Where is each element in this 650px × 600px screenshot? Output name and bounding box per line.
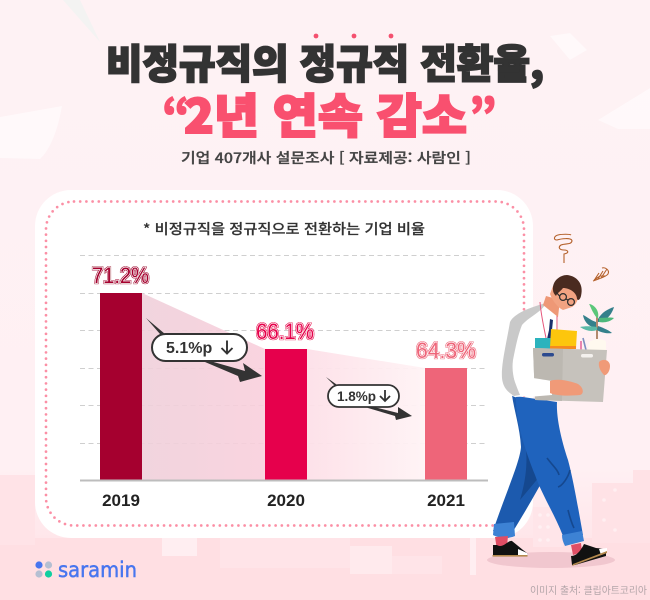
right hand bbox=[599, 360, 610, 375]
face bbox=[550, 286, 578, 310]
teal folder bbox=[535, 338, 553, 349]
title line 2: 2년 연속 감소 bbox=[184, 78, 467, 147]
title line 2: ” bbox=[469, 80, 497, 144]
paper in box bbox=[588, 339, 606, 350]
label 2021: 2021 bbox=[427, 491, 465, 510]
callout: 5.1%p decrease: 5.1%p bbox=[166, 340, 212, 357]
back leg bbox=[493, 395, 552, 538]
necktie bbox=[545, 319, 553, 348]
yellow folder bbox=[550, 329, 577, 348]
stress scribbles bbox=[554, 234, 608, 281]
lanyard bbox=[540, 302, 557, 338]
box handles bbox=[542, 353, 554, 356]
plant bbox=[580, 304, 614, 339]
background: flying papers bbox=[0, 0, 650, 234]
chart grid lines bbox=[80, 256, 488, 444]
callout: 5.1%p decrease bbox=[146, 318, 262, 382]
hair bbox=[553, 275, 582, 300]
bar 2021 bbox=[425, 368, 467, 480]
logo: saramin: saramin bbox=[58, 558, 137, 582]
shadow bbox=[487, 552, 615, 568]
label 2020: 2020 bbox=[267, 491, 305, 510]
baseline bbox=[80, 480, 488, 482]
value 64.3%: 64.3% bbox=[416, 338, 476, 363]
label 2019: 2019 bbox=[102, 491, 140, 510]
box bbox=[533, 348, 607, 402]
bar 2019 bbox=[100, 293, 142, 480]
front cuff bbox=[562, 531, 584, 546]
chart heading: * 비정규직을 정규직으로 전환하는 기업 비율 bbox=[143, 219, 425, 239]
right shoe bbox=[571, 544, 607, 566]
back cuff bbox=[493, 522, 515, 538]
shirt shadow bbox=[502, 303, 546, 396]
title line 1: 비정규직의 정규직 전환율, bbox=[106, 32, 544, 90]
panel: chart card bbox=[35, 190, 533, 538]
sleeve and left hand bbox=[514, 372, 552, 397]
left shoe bbox=[492, 541, 528, 557]
bar chart bbox=[80, 256, 488, 510]
value 66.1%: 66.1% bbox=[256, 319, 314, 344]
pens bbox=[580, 341, 582, 350]
shirt bbox=[502, 303, 558, 397]
glasses bbox=[556, 292, 574, 305]
callout: 1.8%p decrease bbox=[326, 377, 412, 420]
value 71.2%: 71.2% bbox=[92, 263, 149, 288]
emphasis dots bbox=[314, 34, 393, 38]
area 2019 to 2020 bbox=[142, 293, 265, 480]
callout: 1.8%p decrease: 1.8%p bbox=[337, 389, 376, 404]
illustration: office worker carrying box bbox=[487, 234, 615, 568]
title line 2: “ bbox=[162, 80, 190, 144]
area 2020 to 2021 bbox=[307, 349, 425, 480]
neck bbox=[543, 296, 560, 317]
subtitle: 기업 407개사 설문조사 [ 자료제공: 사람인 ] bbox=[181, 148, 471, 168]
front leg bbox=[516, 396, 583, 536]
background: city skyline bbox=[0, 470, 650, 600]
socks bbox=[495, 536, 582, 555]
bar 2020 bbox=[265, 349, 307, 480]
image credit: 이미지 출처: 클립아트코리아 bbox=[530, 582, 647, 597]
